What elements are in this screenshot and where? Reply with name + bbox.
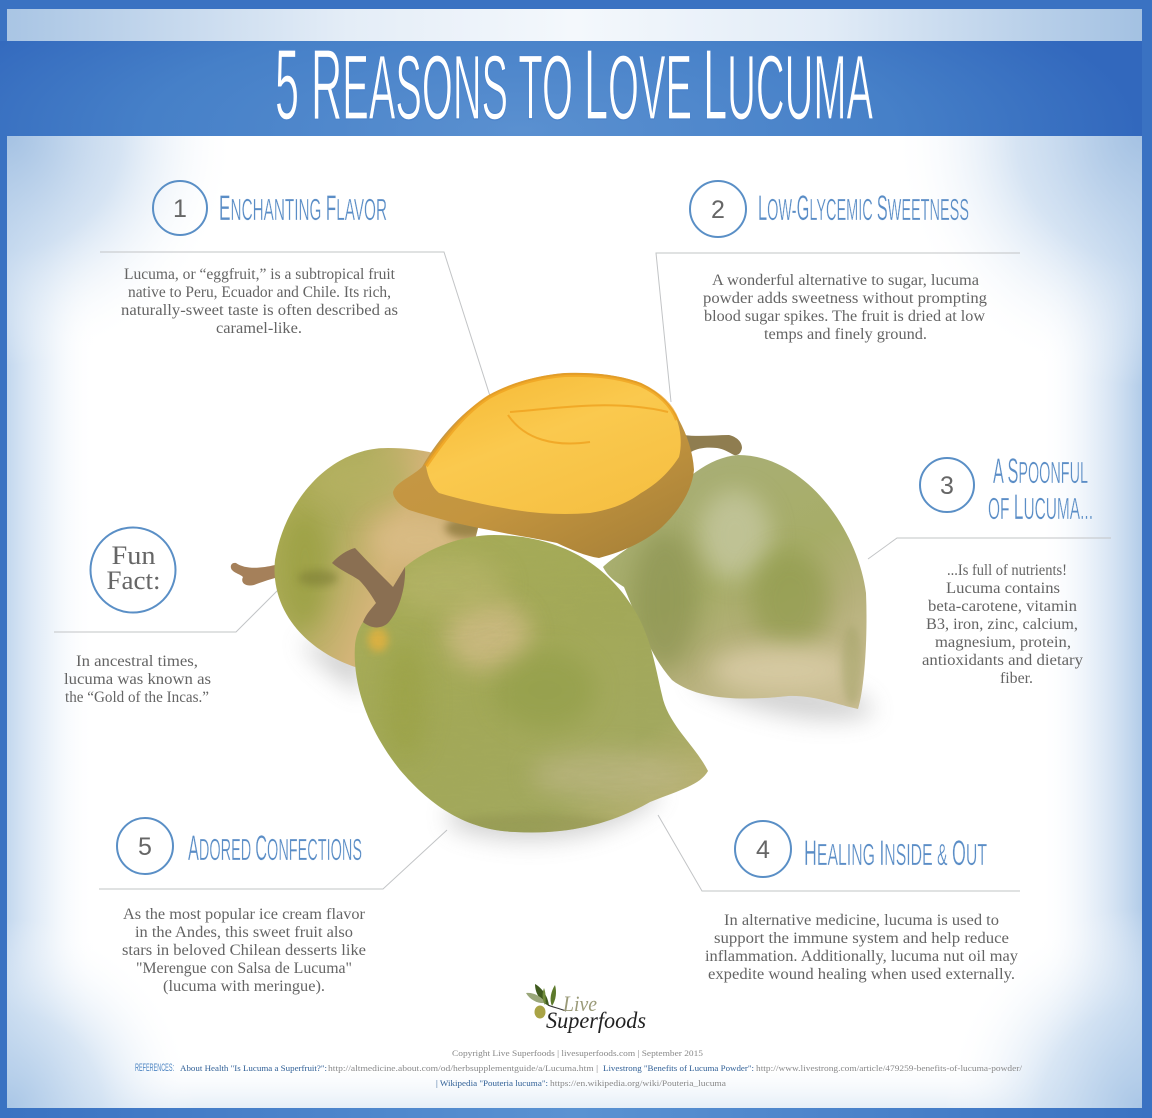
- fun fact body: In ancestral times,: [76, 653, 198, 670]
- body 3: magnesium, protein,: [935, 634, 1071, 651]
- body 5: [122, 906, 366, 995]
- body 4: expedite wound healing when used externally.: [708, 966, 1015, 983]
- body 3: beta-carotene, vitamin: [928, 598, 1077, 615]
- logo: Live Superfoods: [526, 984, 646, 1033]
- heading 4: HEALING INSIDE & OUT: [804, 834, 987, 873]
- body 4: support the immune system and help reduce: [714, 930, 1009, 947]
- fun fact badge: Fun: [112, 541, 156, 570]
- body 1: [121, 266, 398, 337]
- body 2: [703, 272, 987, 343]
- cut fruit stem: [683, 435, 742, 455]
- body 2: A wonderful alternative to sugar, lucuma: [712, 272, 979, 289]
- references line 1: [135, 1062, 1023, 1074]
- title: 5 REASONS TO LOVE LUCUMA: [275, 29, 873, 141]
- number badge 2: [690, 181, 746, 237]
- fruit flesh: [426, 375, 681, 514]
- fun fact body: [64, 653, 211, 706]
- panel: reason 5: [117, 818, 366, 995]
- body 3: fiber.: [1000, 670, 1033, 687]
- body 3: B3, iron, zinc, calcium,: [926, 616, 1078, 633]
- number badge 1: 1: [173, 195, 187, 223]
- references line 2: https://en.wikipedia.org/wiki/Pouteria_lucuma: [550, 1078, 726, 1088]
- body 5: in the Andes, this sweet fruit also: [135, 924, 353, 941]
- body 4: [705, 912, 1018, 983]
- number badge 2: 2: [711, 196, 725, 224]
- body 5: As the most popular ice cream flavor: [123, 906, 366, 923]
- front fruit: [332, 530, 712, 842]
- logo: Live Superfoods: Superfoods: [546, 1008, 646, 1033]
- body 1: caramel-like.: [216, 320, 302, 337]
- footer: copyright and references: [135, 1048, 1023, 1088]
- body 2: temps and finely ground.: [764, 326, 927, 343]
- references line 2: | Wikipedia "Pouteria lucuma":: [436, 1078, 548, 1088]
- heading 3: [988, 452, 1093, 527]
- body 2: powder adds sweetness without prompting: [703, 290, 987, 307]
- heading 2: LOW-GLYCEMIC SWEETNESS: [758, 189, 969, 228]
- number badge 1: [153, 181, 207, 235]
- fruit photo: four lucuma fruits: [231, 373, 875, 842]
- references line 1: REFERENCES:: [135, 1062, 174, 1074]
- fun fact badge: Fact:: [106, 566, 160, 595]
- references line 1: About Health "Is Lucuma a Superfruit?":: [180, 1063, 327, 1073]
- top light strip: [7, 9, 1142, 41]
- title banner: [0, 29, 1142, 141]
- body 5: (lucuma with meringue).: [163, 978, 325, 995]
- heading 5: ADORED CONFECTIONS: [188, 829, 362, 868]
- number badge 5: 5: [138, 833, 152, 861]
- panel: fun fact: [64, 528, 211, 706]
- icon: olive branch: [526, 984, 566, 1018]
- front fruit stem: [332, 548, 405, 627]
- number badge 4: [735, 821, 791, 877]
- copyright: Copyright Live Superfoods | livesuperfoods.com | September 2015: [452, 1048, 703, 1058]
- bottom bar: [0, 1108, 1152, 1118]
- body 3: Lucuma contains: [946, 580, 1060, 597]
- cast shadows: [300, 640, 875, 840]
- references line 2: [436, 1078, 726, 1088]
- panel: reason 2: [690, 181, 987, 343]
- body 2: blood sugar spikes. The fruit is dried at low: [704, 308, 986, 325]
- panel: reason 1: [121, 181, 398, 337]
- number badge 4: 4: [756, 836, 770, 864]
- number badge 3: 3: [940, 472, 954, 500]
- body 3: [922, 562, 1083, 687]
- body 3: antioxidants and dietary: [922, 652, 1083, 669]
- number badge 5: [117, 818, 173, 874]
- fun fact body: lucuma was known as: [64, 671, 211, 688]
- references line 1: http://www.livestrong.com/article/479259-benefits-of-lucuma-powder/: [756, 1063, 1023, 1073]
- body 5: "Merengue con Salsa de Lucuma": [136, 960, 352, 977]
- body 5: stars in beloved Chilean desserts like: [122, 942, 366, 959]
- body 1: native to Peru, Ecuador and Chile. Its rich,: [128, 284, 391, 301]
- heading 1: ENCHANTING FLAVOR: [219, 189, 387, 228]
- references line 1: Livestrong "Benefits of Lucuma Powder":: [603, 1063, 754, 1073]
- body 1: naturally-sweet taste is often described as: [121, 302, 398, 319]
- left fruit: [230, 448, 478, 667]
- panel: reason 3: [920, 452, 1093, 687]
- body 4: inflammation. Additionally, lucuma nut oil may: [705, 948, 1018, 965]
- body 4: In alternative medicine, lucuma is used to: [724, 912, 999, 929]
- cut open fruit: [393, 373, 742, 558]
- leader lines: [54, 252, 1111, 891]
- right fruit: [600, 450, 872, 715]
- logo wordmark: Live: [562, 991, 597, 1016]
- body 3: ...Is full of nutrients!: [947, 562, 1067, 579]
- fun fact badge: [90, 528, 176, 612]
- references line 1: http://altmedicine.about.com/od/herbsupplementguide/a/Lucuma.htm |: [328, 1063, 598, 1073]
- fun fact body: the “Gold of the Incas.”: [65, 689, 209, 706]
- number badge 3: [920, 458, 974, 512]
- panel: reason 4: [705, 821, 1018, 983]
- body 1: Lucuma, or “eggfruit,” is a subtropical fruit: [124, 266, 396, 283]
